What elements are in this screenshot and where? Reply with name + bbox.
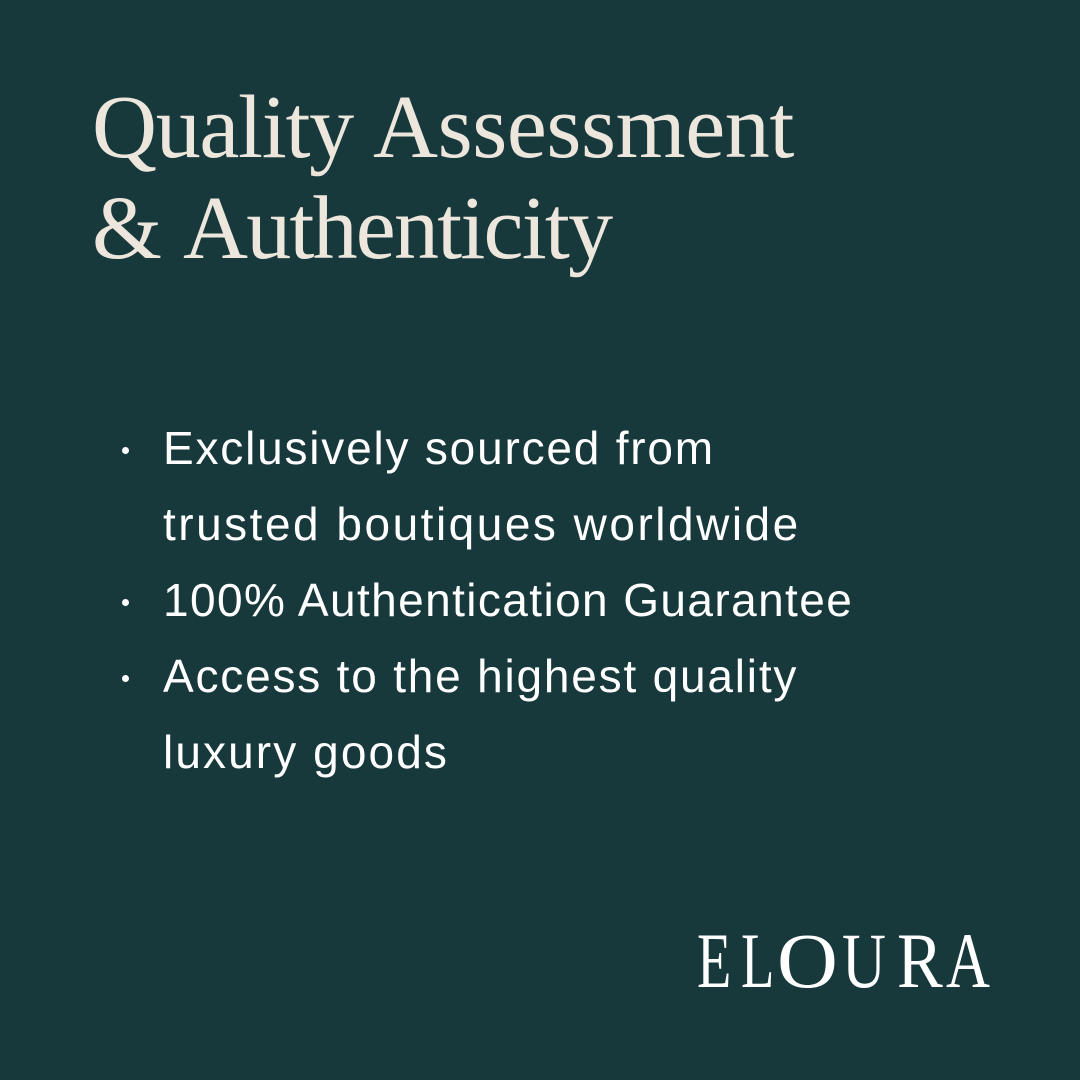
logo: Eloura wordmark: R <box>897 917 943 1004</box>
title: & <box>92 179 162 278</box>
title <box>92 78 794 278</box>
bullet dot 3 <box>122 675 129 682</box>
bullet item: guarantee: 100% Authentication Guarantee <box>163 574 853 626</box>
bullet item: sourcing <box>163 422 801 550</box>
logo: Eloura wordmark <box>697 917 990 1004</box>
title: Authenticity <box>183 179 611 278</box>
logo: Eloura wordmark: U <box>842 917 886 1004</box>
bullet item: access <box>163 650 798 778</box>
bullet list <box>122 422 853 778</box>
title: Quality <box>92 78 353 177</box>
bullet item: access: luxury goods <box>163 726 449 778</box>
title: Assessment <box>373 78 794 177</box>
bullet item: access: Access to the highest quality <box>163 650 798 702</box>
logo: Eloura wordmark: A <box>946 917 990 1004</box>
logo: Eloura wordmark: E <box>697 917 731 1004</box>
bullet item: sourcing: trusted boutiques worldwide <box>163 498 801 550</box>
logo: Eloura wordmark: O <box>777 917 838 1004</box>
bullet item: sourcing: Exclusively sourced from <box>163 422 715 474</box>
logo: Eloura wordmark: L <box>741 917 774 1004</box>
bullet dot 1 <box>122 447 129 454</box>
bullet dot 2 <box>122 599 129 606</box>
